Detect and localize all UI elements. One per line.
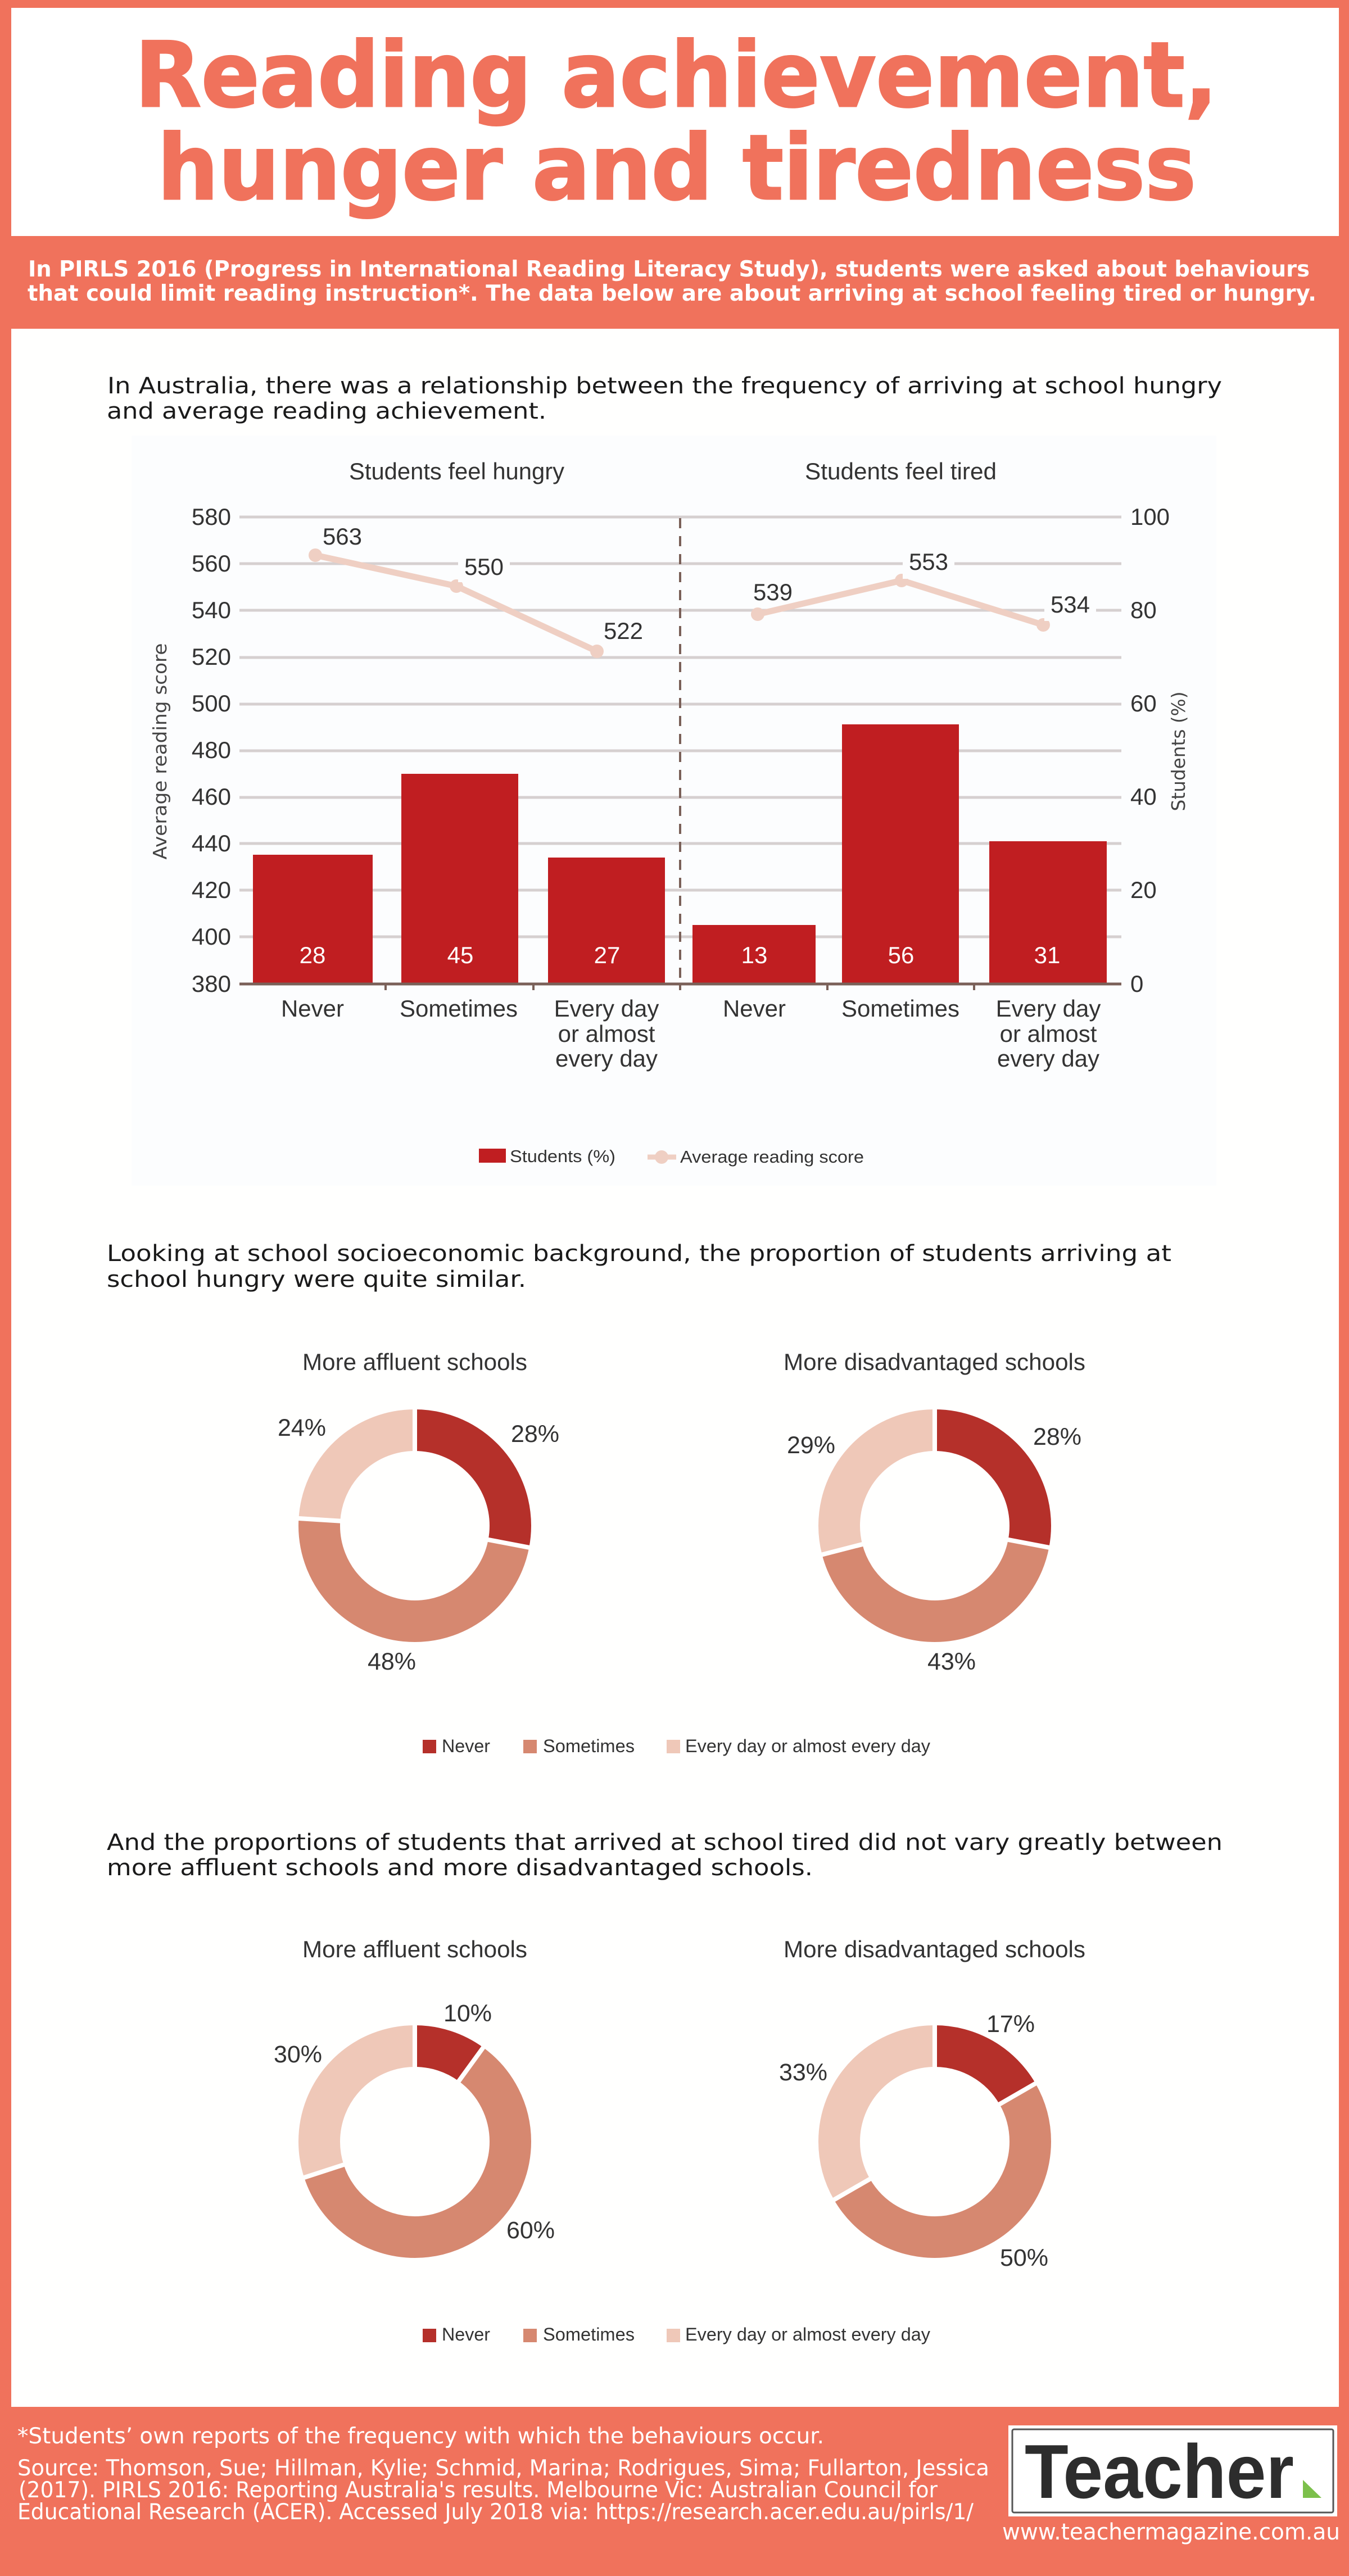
donut value labels: 29% — [787, 1432, 835, 1459]
left axis labels: 460 — [192, 783, 231, 810]
donut legend: Sometimes — [543, 1736, 635, 1756]
dashed divider — [679, 518, 681, 983]
left axis labels: 500 — [192, 690, 231, 716]
footnote: *Students’ own reports of the frequency with which the behaviours occur. — [17, 2424, 824, 2449]
category labels: Sometimes — [841, 995, 959, 1022]
right axis title: Students (%) — [1167, 691, 1189, 811]
donut value labels: 28% — [511, 1421, 559, 1448]
category labels: Never — [281, 995, 344, 1022]
category labels: every day — [555, 1045, 658, 1072]
donut: disadvantaged tiredness — [830, 2021, 1039, 2237]
donut legend: Never — [442, 2324, 490, 2344]
donut value labels: 10% — [443, 2000, 492, 2027]
source text: (2017). PIRLS 2016: Reporting Australia's results. Melbourne Vic: Australian Council for — [19, 2478, 938, 2503]
paragraph: socioeconomic tiredness — [107, 1830, 1223, 1881]
bar value labels: 45 — [447, 942, 473, 968]
right axis labels: 20 — [1130, 877, 1157, 903]
line value labels: 522 — [604, 618, 643, 644]
donut legend — [423, 1736, 930, 1756]
category labels: Every day — [554, 995, 659, 1022]
chart legend — [479, 1146, 864, 1167]
bar value labels — [300, 942, 1060, 968]
chart legend: Students (%) — [510, 1146, 615, 1166]
category labels: Sometimes — [400, 995, 518, 1022]
donut value labels: 28% — [1033, 1423, 1081, 1450]
left axis labels — [192, 504, 231, 997]
intro banner text: In PIRLS 2016 (Progress in International Reading Literacy Study), students were asked about behaviours — [28, 257, 1310, 282]
bar value labels: 28 — [300, 942, 325, 968]
paragraph: hunger relationship — [107, 373, 1222, 424]
paragraph: socioeconomic tiredness: And the proportions of students that arrived at school tired did not vary greatly between — [107, 1830, 1223, 1856]
donut: affluent tiredness — [300, 2021, 510, 2237]
title panel — [11, 8, 1339, 236]
paragraph: socioeconomic hunger: school hungry were quite similar. — [107, 1267, 526, 1292]
donut legend: Sometimes — [543, 2324, 635, 2344]
bars: students percent — [253, 724, 1107, 984]
donut value labels: 24% — [278, 1414, 326, 1441]
heading: more affluent schools: More affluent schools — [302, 1936, 527, 1962]
paragraph: socioeconomic hunger — [107, 1241, 1171, 1292]
category labels: every day — [997, 1045, 1099, 1072]
line series: hungry scores — [309, 548, 604, 658]
donut value labels: 60% — [506, 2217, 555, 2244]
main white panel — [11, 329, 1339, 2407]
bar value labels: 13 — [741, 942, 767, 968]
right axis labels: 60 — [1130, 690, 1157, 716]
donut legend: Never — [442, 1736, 490, 1756]
chart heading: students feel hungry: Students feel hungry — [349, 458, 564, 484]
bar value labels: 27 — [594, 942, 620, 968]
left axis labels: 520 — [192, 643, 231, 670]
source text: Educational Research (ACER). Accessed July 2018 via: https://research.acer.edu.au/pirls/1/ — [17, 2500, 974, 2525]
line value labels: 534 — [1051, 591, 1090, 618]
heading: more disadvantaged schools: More disadvantaged schools — [784, 1349, 1085, 1375]
category labels — [281, 995, 1101, 1072]
donut: disadvantaged hunger — [818, 1405, 1053, 1621]
website url: www.teachermagazine.com.au — [1002, 2519, 1340, 2545]
left axis labels: 480 — [192, 737, 231, 763]
left axis labels: 420 — [192, 877, 231, 903]
left axis title: Average reading score — [149, 643, 171, 860]
heading: more disadvantaged schools: More disadvantaged schools — [784, 1936, 1085, 1962]
donut value labels: 48% — [368, 1648, 416, 1675]
panel: combined bar and line chart — [132, 436, 1216, 1186]
left axis labels: 440 — [192, 830, 231, 856]
left axis labels: 560 — [192, 550, 231, 577]
line value labels: 550 — [464, 554, 504, 580]
right axis labels: 80 — [1130, 597, 1157, 623]
title — [135, 22, 1217, 220]
category labels: or almost — [558, 1021, 655, 1047]
chart heading: students feel tired: Students feel tired — [805, 458, 997, 484]
donut value labels — [274, 2000, 1048, 2271]
donut value labels: 17% — [986, 2011, 1035, 2038]
donut legend — [423, 2324, 930, 2344]
right axis labels — [1130, 504, 1170, 997]
paragraph: hunger relationship: and average reading achievement. — [107, 398, 546, 424]
source text — [17, 2456, 989, 2525]
chart legend: Average reading score — [680, 1147, 864, 1167]
line value labels — [323, 523, 1090, 644]
left axis labels: 380 — [192, 970, 231, 997]
bar value labels: 31 — [1034, 942, 1060, 968]
donut value labels: 43% — [927, 1648, 976, 1675]
donut legend: Every day or almost every day — [685, 1736, 930, 1756]
category labels: Never — [723, 995, 786, 1022]
intro banner text — [28, 257, 1316, 306]
bar value labels: 56 — [888, 942, 914, 968]
donut value labels: 50% — [1000, 2244, 1048, 2271]
donut legend: Every day or almost every day — [685, 2324, 930, 2344]
title: Reading achievement, — [135, 22, 1217, 128]
source text: Source: Thomson, Sue; Hillman, Kylie; Schmid, Marina; Rodrigues, Sima; Fullarton, Jessica — [17, 2456, 989, 2481]
line value labels: 563 — [323, 523, 362, 550]
left axis labels: 400 — [192, 923, 231, 950]
right axis labels: 0 — [1130, 970, 1143, 997]
paragraph: hunger relationship: In Australia, there was a relationship between the frequency of arriving at school hungry — [107, 373, 1222, 399]
donut: affluent hunger — [294, 1405, 533, 1621]
x axis and ticks — [239, 984, 1121, 990]
title: hunger and tiredness — [157, 115, 1196, 220]
intro banner text: that could limit reading instruction*. The data below are about arriving at school feeling tired or hungry. — [28, 281, 1316, 306]
panel: tiredness donut charts — [274, 1936, 1085, 2344]
donut value labels: 33% — [779, 2059, 827, 2086]
paragraph: socioeconomic hunger: Looking at school socioeconomic background, the proportion of students arriving at — [107, 1241, 1171, 1267]
right axis labels: 40 — [1130, 783, 1157, 810]
category labels: Every day — [996, 995, 1101, 1022]
left axis labels: 540 — [192, 597, 231, 623]
donut value labels — [278, 1414, 1081, 1675]
line value labels: 539 — [753, 579, 793, 605]
heading: more affluent schools: More affluent schools — [302, 1349, 527, 1375]
category labels: or almost — [1000, 1021, 1097, 1047]
line series: tired scores — [751, 574, 1050, 632]
paragraph: socioeconomic tiredness: more affluent schools and more disadvantaged schools. — [107, 1855, 813, 1881]
logo: Teacher: Teacher — [1025, 2429, 1294, 2514]
right axis labels: 100 — [1130, 504, 1170, 530]
line value labels: 553 — [909, 548, 948, 575]
left axis labels: 580 — [192, 504, 231, 530]
donut value labels: 30% — [274, 2041, 322, 2068]
panel: hunger donut charts — [278, 1349, 1085, 1756]
